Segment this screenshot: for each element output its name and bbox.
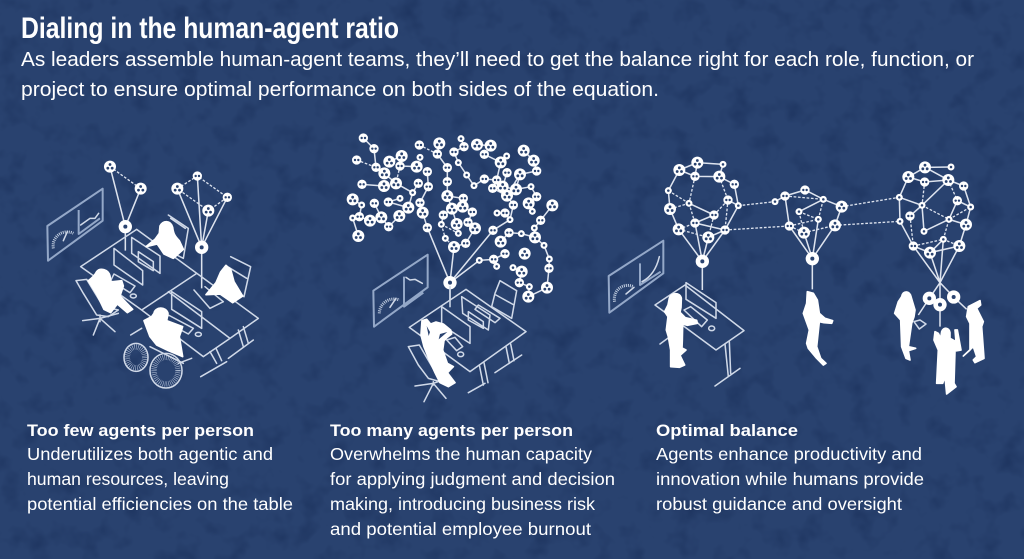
whiteboard: [47, 189, 103, 261]
whiteboard: [609, 241, 663, 313]
chairs: [76, 215, 251, 335]
whiteboard: [373, 255, 428, 327]
person at standing desk: [665, 294, 697, 367]
agent cluster right: [896, 161, 974, 327]
agent cluster middle: [771, 185, 848, 289]
text: too few agents: human resources, leaving: [27, 469, 229, 489]
title: Dialing in the human-agent ratio: [21, 12, 399, 45]
text: optimal balance: Agents enhance productivity and: [656, 444, 922, 464]
text: too many agents: and potential employee burnout: [330, 519, 591, 539]
text: too few agents: [27, 421, 293, 514]
person standing centre: [803, 292, 833, 365]
agent cluster left: [664, 157, 742, 290]
text: optimal balance: innovation while humans provide: [656, 469, 924, 489]
text: too many agents: Too many agents per person: [330, 421, 573, 440]
text: too many agents: [330, 421, 615, 539]
text: optimal balance: Optimal balance: [656, 421, 798, 440]
illustration: optimal balance: [609, 157, 984, 394]
text: too many agents: for applying judgment and decision: [330, 469, 615, 489]
illustration: too many agents: [347, 133, 558, 303]
text: optimal balance: robust guidance and oversight: [656, 494, 902, 514]
wheelchair: [124, 328, 192, 388]
text: too many agents: making, introducing business risk: [330, 494, 595, 514]
desk: [655, 283, 744, 386]
intro text: project to ensure optimal performance on both sides of the equation.: [21, 79, 659, 101]
text: too many agents: Overwhelms the human capacity: [330, 444, 592, 464]
dashed links between clusters: [725, 197, 900, 230]
text: too few agents: potential efficiencies on the table: [27, 494, 293, 514]
text: too few agents: Too few agents per person: [27, 421, 254, 440]
people: [88, 222, 243, 357]
illustration: too few agents: [47, 161, 258, 388]
group of three people: [895, 292, 984, 394]
desks: [81, 229, 258, 377]
chair front: [408, 345, 450, 402]
intro text: As leaders assemble human-agent teams, they’ll need to get the balance right for each role, function, or: [21, 49, 974, 71]
text: too few agents: Underutilizes both agentic and: [27, 444, 273, 464]
intro text: [21, 49, 974, 101]
chair back: [492, 281, 517, 318]
agent network: [347, 133, 558, 303]
workstation: too many agents: [373, 255, 526, 402]
agent cluster right: [171, 171, 232, 288]
person reclining: [421, 319, 455, 387]
desk: [409, 287, 526, 393]
agent cluster left: [104, 161, 147, 251]
text: optimal balance: [656, 421, 924, 514]
